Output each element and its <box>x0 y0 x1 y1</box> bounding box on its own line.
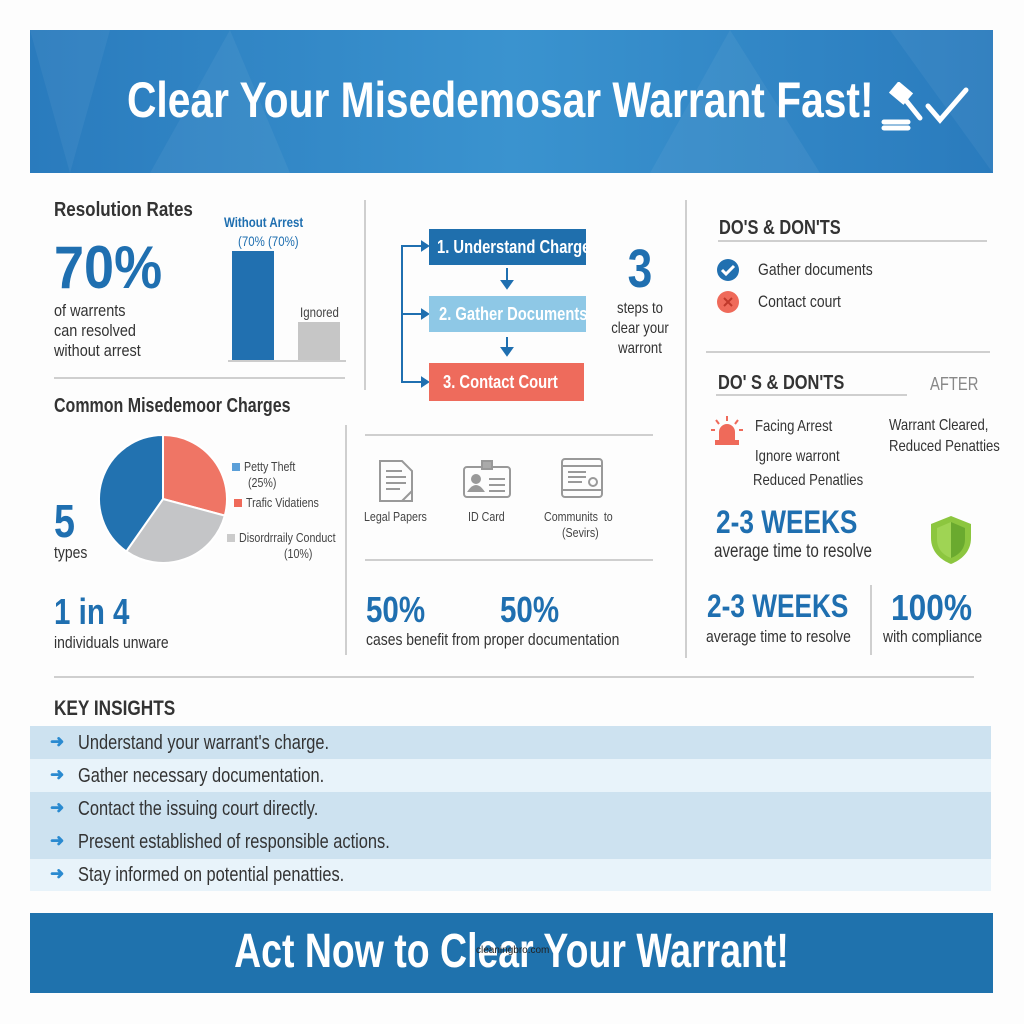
pie legend: (10%) <box>284 546 312 561</box>
icon group: documents <box>364 458 613 540</box>
stat: 50% documentation: cases benefit from proper documentation <box>366 630 619 649</box>
insight rows: Present established of responsible actions. <box>78 831 390 853</box>
icon group: documents: (Sevirs) <box>562 525 599 540</box>
insight rows: Contact the issuing court directly. <box>78 798 318 820</box>
pie legend: (25%) <box>248 475 276 490</box>
heading: Resolution Rates <box>54 199 193 221</box>
insight rows: ➜ <box>50 864 64 883</box>
bar chart: Ignored <box>300 304 339 320</box>
step 3: 3. Contact Court <box>443 372 558 392</box>
panel: common charges: individuals unware <box>54 633 169 652</box>
bar chart: (70% (70%) <box>238 233 299 249</box>
panel: before / after <box>711 372 1000 489</box>
heading: Common Misedemoor Charges <box>54 395 290 417</box>
panel: before / after: Ignore warront <box>755 448 840 465</box>
panel: before / after: AFTER <box>930 374 978 394</box>
stat: 50% documentation <box>366 589 619 649</box>
step 1 <box>429 229 586 265</box>
bar chart: Without Arrest <box>224 214 303 230</box>
big stat 70%: 70% <box>54 234 162 301</box>
stat: 5 types: 5 <box>54 495 75 547</box>
step 2 <box>429 296 586 332</box>
stat: 100% <box>883 587 982 646</box>
panel: before / after: Reduced Penatlies <box>753 472 863 489</box>
insight rows: ➜ <box>50 765 64 784</box>
icon: shield <box>931 516 971 564</box>
stat caption <box>54 301 141 360</box>
panel: resolution rates <box>54 199 193 360</box>
stat: 2-3 weeks: average time to resolve <box>714 541 872 562</box>
stat caption: of warrents <box>54 301 125 320</box>
panel: before / after: Warrant Cleared, <box>889 417 988 434</box>
stat: 3 steps: clear your <box>611 320 669 337</box>
step 1: 1. Understand Charge <box>437 237 590 257</box>
stat: 100%: with compliance <box>883 627 982 646</box>
panel: before / after: DO' S & DON'TS <box>718 372 844 394</box>
stat: 2-3 weeks <box>714 504 872 562</box>
panel: do's and don'ts: Contact court <box>758 292 841 311</box>
watermark: cleaningbro.com <box>476 945 549 956</box>
panel: key insights <box>30 697 991 891</box>
stat: 3 steps: steps to <box>617 300 663 317</box>
footer call to action: Act Now to Clear Your Warrant! <box>234 925 789 978</box>
stat: 3 steps <box>611 239 669 357</box>
pie legend: Petty Theft <box>244 459 295 474</box>
stat: 2-3 weeks bottom: average time to resolve <box>706 627 851 646</box>
panel: common charges <box>54 395 336 652</box>
stat: 2-3 weeks bottom: 2-3 WEEKS <box>707 588 848 624</box>
insight rows <box>30 726 991 891</box>
icon group: documents: Communits to <box>544 509 613 524</box>
panel: do's and don'ts: Gather documents <box>758 260 873 279</box>
pie chart <box>100 436 226 562</box>
insight rows: ➜ <box>50 831 64 850</box>
icon group: documents: Legal Papers <box>364 509 427 524</box>
panel: before / after: Facing Arrest <box>755 418 832 435</box>
step 2: 2. Gather Documents <box>439 304 587 324</box>
step 3 <box>429 363 584 401</box>
panel: common charges: types <box>54 543 87 562</box>
stat: 100%: 100% <box>891 587 972 628</box>
icon: ID card <box>463 460 511 498</box>
icon: legal papers <box>379 460 413 502</box>
insight rows: ➜ <box>50 732 64 751</box>
insight rows: ➜ <box>50 798 64 817</box>
stat caption: without arrest <box>54 341 141 360</box>
icon: alarm <box>711 416 743 445</box>
header banner <box>30 30 993 173</box>
insight rows: Gather necessary documentation. <box>78 765 324 787</box>
flowchart: 3 steps <box>401 229 590 401</box>
footer banner <box>30 913 993 993</box>
stat: 2-3 weeks bottom <box>706 588 851 646</box>
stat: 3 steps: warront <box>618 340 662 357</box>
icon: check <box>717 259 739 281</box>
insight rows: Understand your warrant's charge. <box>78 732 329 754</box>
panel: do's and don'ts <box>717 217 987 313</box>
stat: 3 steps: 3 <box>628 239 652 299</box>
bar chart <box>224 214 346 362</box>
panel: do's and don'ts: DO'S & DON'TS <box>719 217 841 239</box>
icon: cross <box>717 291 739 313</box>
pie legend: Trafic Vidatiens <box>246 495 319 510</box>
insight rows: Stay informed on potential penatties. <box>78 864 344 886</box>
pie legend <box>227 459 336 561</box>
stat: 50% documentation: 50% <box>500 589 559 630</box>
icon: gavel and check <box>882 82 968 130</box>
stat caption: can resolved <box>54 321 136 340</box>
stat: 50% documentation: 50% <box>366 589 425 630</box>
stat: 2-3 weeks: 2-3 WEEKS <box>716 504 857 540</box>
stat: 1 in 4: 1 in 4 <box>54 591 129 632</box>
title: Clear Your Misedemosar Warrant Fast! <box>127 72 874 128</box>
panel: before / after: Reduced Penatties <box>889 438 1000 455</box>
panel: key insights: KEY INSIGHTS <box>54 697 175 720</box>
pie legend: Disordrraily Conduct <box>239 530 336 545</box>
icon group: documents: ID Card <box>468 509 505 524</box>
icon: certificate <box>561 458 603 498</box>
